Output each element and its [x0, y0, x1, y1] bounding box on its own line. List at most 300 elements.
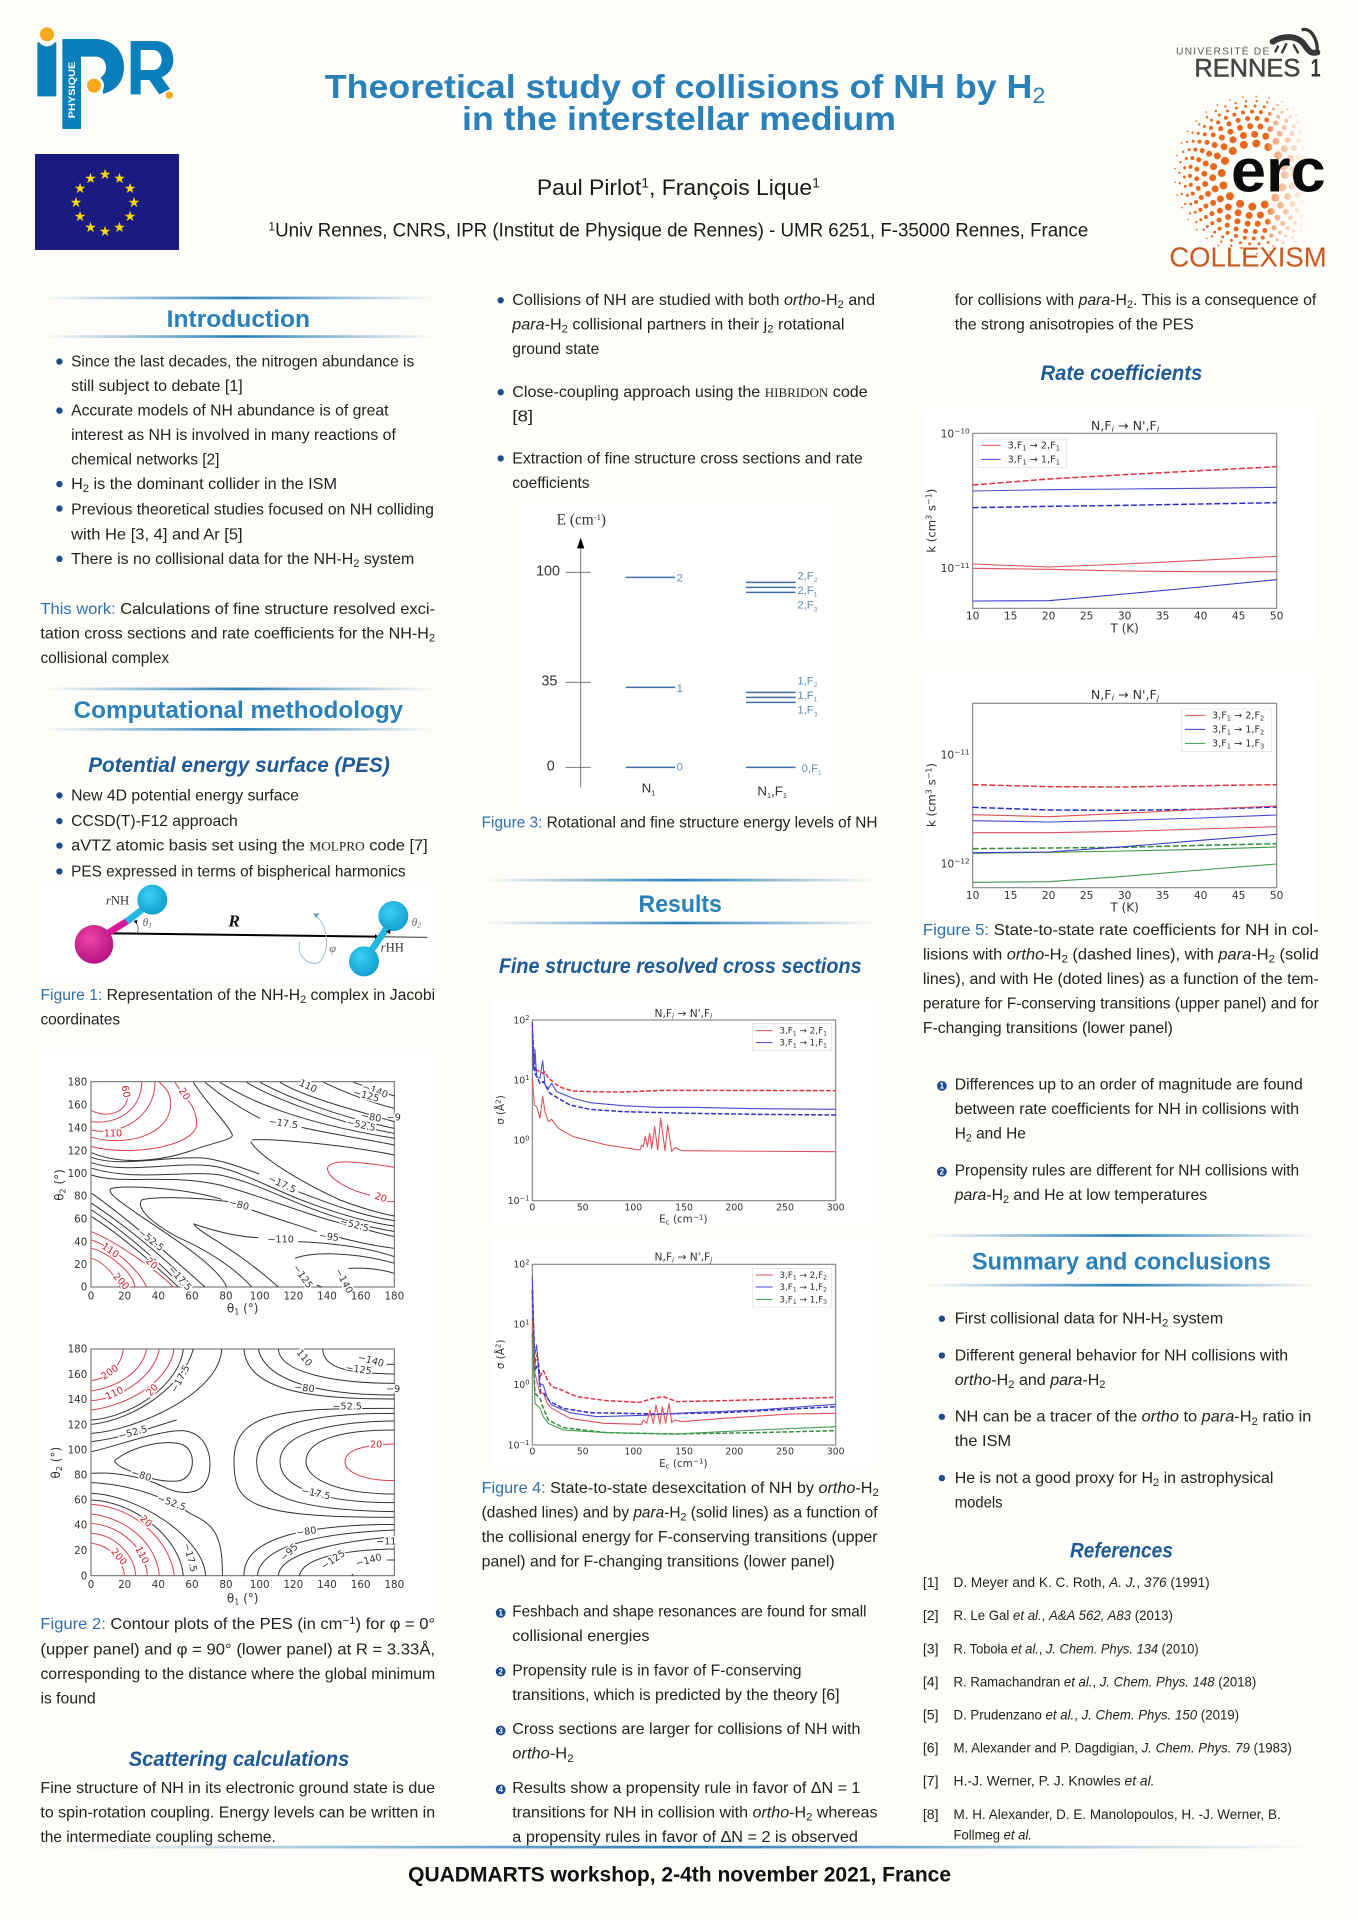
numbered findings: rate coefficients: and He at low temperatures — [1009, 1187, 1207, 1204]
logo: EU flag: ★ — [74, 180, 86, 196]
chart: cross sections F-changing: 3,F — [779, 1271, 793, 1281]
figure 3: energy level diagram: 1 — [814, 697, 818, 704]
bullet list: introduction: 2 — [83, 483, 89, 495]
chart: cross sections F-changing: 0 — [525, 1379, 529, 1387]
figure 3: energy level diagram — [520, 507, 833, 807]
subheading: scattering calculations: Scattering calculations — [129, 1748, 349, 1771]
bullet list: introduction: 2 — [353, 558, 359, 570]
chart: cross sections F-changing: → 1,F — [797, 1283, 823, 1293]
contour plot: lower panel phi=90: −125 — [345, 1363, 372, 1377]
numbered findings: cross sections: whereas — [812, 1805, 878, 1822]
subheading: references: References — [1070, 1540, 1173, 1563]
figure 1: Jacobi coordinates of NH-H2: θ — [143, 917, 148, 929]
chart: rate coefficients F-changing: ) — [924, 763, 938, 768]
chart: rate coefficients F-conserving: i — [1157, 424, 1160, 434]
numbered findings: cross sections: 2 — [498, 1668, 503, 1677]
contour plot: lower panel phi=90: 2 — [55, 1466, 64, 1471]
chart: cross sections F-changing: ) — [495, 1340, 507, 1344]
title: Theoretical study of collisions of NH by H — [325, 68, 991, 106]
heading: Results: Results — [639, 891, 722, 918]
chart: cross sections F-changing: j — [709, 1255, 713, 1264]
affiliation: Univ Rennes, CNRS, IPR (Institut de Physique de Rennes) - UMR 6251, F-35000 Rennes, France — [275, 221, 1088, 242]
reference list: M. H. Alexander, D. E. Manolopoulos, H. -J. Werner, B. — [954, 1806, 1281, 1822]
contour plot: upper panel phi=0: 60 — [119, 1085, 132, 1099]
panel: references — [923, 1540, 1292, 1843]
chart: cross sections F-changing: i — [672, 1255, 674, 1264]
logo: Université de Rennes 1: RENNES — [1194, 55, 1300, 83]
chart: cross sections F-changing: 100 — [624, 1447, 642, 1458]
logo: EU flag: ★ — [99, 166, 111, 182]
bullet list: PES: PES expressed in terms of bispherical harmonics — [71, 863, 406, 880]
chart: rate coefficients F-changing: N,F — [1091, 687, 1112, 702]
chart: rate coefficients F-conserving: ) — [924, 489, 938, 493]
contour plot: upper panel phi=0: 60 — [185, 1290, 199, 1302]
title: in the interstellar medium — [462, 100, 896, 138]
chart: rate coefficients F-conserving: N,F — [1091, 418, 1112, 433]
chart: rate coefficients F-changing: 3,F — [1212, 725, 1227, 736]
bullet list: introduction: with He [3, 4] and Ar [5] — [70, 526, 243, 543]
caption: figure 2: ) for φ = 0° — [356, 1616, 435, 1633]
figure 1: Jacobi coordinates of NH-H2: φ — [329, 941, 336, 955]
chart: cross sections F-changing: 3 — [823, 1299, 827, 1306]
logo: ERC COLLEXISM: COLLEXISM — [1169, 242, 1327, 273]
chart: rate coefficients F-changing: s — [924, 779, 938, 789]
contour plot: lower panel phi=90: −95 — [278, 1542, 301, 1564]
text block: scattering — [40, 1780, 435, 1846]
bullet list: conclusions: NH can be a tracer of the ortho to para-H — [955, 1409, 1251, 1426]
contour plot: lower panel phi=90: −17.5 — [169, 1363, 193, 1395]
figure 3: energy level diagram: 3 — [814, 606, 818, 613]
contour plot: lower panel phi=90: −52.5 — [332, 1401, 362, 1412]
contour plot: upper panel phi=0: 100 — [250, 1290, 270, 1302]
contour plot: lower panel phi=90: 100 — [68, 1444, 87, 1456]
chart: rate coefficients F-changing: j — [1156, 693, 1160, 703]
figure 3: energy level diagram: 3 — [814, 711, 818, 718]
contour plot: upper panel phi=0: 20 — [176, 1086, 192, 1102]
contour plot: lower panel phi=90: 20 — [370, 1439, 382, 1450]
bullet list: conclusions: 2 — [1099, 1379, 1105, 1391]
contour plot: lower panel phi=90: 20 — [74, 1545, 87, 1557]
chart: rate coefficients F-changing: 35 — [1156, 889, 1169, 902]
contour plot: lower panel phi=90: 60 — [74, 1494, 87, 1506]
chart: rate coefficients F-changing: 1 — [1227, 714, 1231, 722]
chart: rate coefficients F-conserving: 3 — [924, 515, 933, 520]
bullet list: conclusions: system — [1168, 1311, 1223, 1328]
chart: cross sections F-changing: 250 — [776, 1447, 794, 1458]
contour plot: upper panel phi=0: 40 — [152, 1290, 165, 1302]
chart: cross sections F-conserving: ) — [495, 1095, 507, 1099]
numbered findings: cross sections: 1 — [498, 1609, 503, 1618]
bullet list: conclusions: 2 — [1008, 1379, 1014, 1391]
chart: rate coefficients F-changing: 3,F — [1212, 711, 1227, 722]
chart: cross sections F-conserving: 1 — [525, 1074, 529, 1082]
chart: cross sections F-conserving: 1 — [793, 1042, 797, 1049]
contour plot: upper panel phi=0: 1 — [234, 1307, 239, 1316]
panel: computational methodology — [43, 688, 435, 880]
chart: rate coefficients F-changing: k (cm — [924, 794, 938, 827]
contour plot: lower panel phi=90: −80 — [296, 1525, 317, 1539]
chart: rate coefficients F-conserving: 35 — [1156, 610, 1169, 623]
figure 1: Jacobi coordinates of NH-H2: rHH — [381, 940, 404, 954]
contour plot: upper panel phi=0: 20 — [143, 1256, 159, 1272]
chart: cross sections F-conserving: σ (Å — [495, 1104, 507, 1125]
panel: middle column bullets: [8] — [512, 409, 533, 426]
bullet list: conclusions: Different general behavior for NH collisions with — [955, 1347, 1288, 1364]
numbered findings: cross sections: transitions, which is predicted by the theory [6] — [512, 1687, 840, 1704]
figure 3: energy level diagram: 1 — [677, 683, 683, 695]
reference list: [2] — [923, 1607, 939, 1623]
chart: cross sections F-changing: −1 — [693, 1457, 704, 1466]
text block: right column continuation — [955, 292, 1317, 385]
contour plot: lower panel phi=90: −9 — [386, 1384, 400, 1395]
chart: rate coefficients F-conserving: 45 — [1232, 610, 1245, 623]
bullet list: introduction — [56, 353, 434, 570]
contour plot: lower panel phi=90: 160 — [68, 1369, 87, 1381]
chart: rate coefficients F-changing: → N',F — [1114, 687, 1157, 702]
reference list: [6] — [923, 1740, 939, 1756]
logo: EU flag: ★ — [124, 208, 136, 224]
contour plot: lower panel phi=90 — [49, 1344, 404, 1607]
contour plot: lower panel phi=90: 20 — [145, 1382, 161, 1399]
chart: rate coefficients F-conserving: 10 — [941, 562, 954, 575]
caption: figure 5: F-changing transitions (lower panel) — [923, 1020, 1173, 1037]
figure 3: energy level diagram: 1,F — [797, 675, 814, 687]
chart: rate coefficients F-changing: → 2,F — [1231, 711, 1260, 722]
chart: rate coefficients F-conserving: −10 — [954, 426, 970, 435]
figure 3: energy level diagram: 1,F — [797, 705, 814, 717]
text block: this work: 2 — [429, 633, 435, 645]
contour plot: upper panel phi=0: 160 — [351, 1290, 371, 1302]
numbered findings: rate coefficients: Propensity rules are different for NH collisions with — [955, 1162, 1299, 1179]
title: 2 — [1032, 83, 1045, 108]
chart: rate coefficients F-conserving: → 2,F — [1027, 441, 1056, 452]
chart: rate coefficients F-conserving: 1 — [1056, 458, 1060, 466]
chart: rate coefficients F-changing: 3 — [924, 789, 933, 794]
figure 3: energy level diagram: 35 — [541, 674, 557, 690]
contour plot: lower panel phi=90: (°) — [239, 1592, 258, 1606]
contour plot: upper panel phi=0: 80 — [74, 1191, 87, 1203]
chart: rate coefficients F-changing: 2 — [1260, 728, 1264, 736]
authors: Paul Pirlot — [537, 175, 637, 200]
contour plot: upper panel phi=0: −17.5 — [266, 1173, 298, 1196]
chart: cross sections F-changing: 2 — [494, 1344, 503, 1348]
contour plot: lower panel phi=90: 0 — [88, 1579, 94, 1591]
caption: figure 5: lines), and with He (doted lines) as a function of the tem- — [923, 971, 1319, 988]
contour plot: upper panel phi=0: −80 — [360, 1110, 382, 1125]
reference list: R. Ramachandran et al., J. Chem. Phys. 148 (2018) — [954, 1673, 1256, 1689]
contour plot: upper panel phi=0: 160 — [68, 1100, 87, 1112]
numbered findings: cross sections: Feshbach and shape resonances are found for small — [512, 1604, 866, 1621]
figure 3: energy level diagram: ) — [601, 512, 606, 529]
text block: this work — [40, 601, 435, 667]
contour plot: upper panel phi=0: 20 — [373, 1191, 388, 1205]
reference list: D. Prudenzano et al., J. Chem. Phys. 150 (2019) — [954, 1707, 1239, 1723]
contour plot: upper panel phi=0: 60 — [74, 1214, 87, 1226]
caption: figure 1: 2 — [300, 994, 306, 1006]
chart: cross sections F-conserving: 10 — [513, 1075, 525, 1086]
bullet list: introduction: interest as NH is involved in many reactions of — [71, 427, 396, 444]
chart: rate coefficients F-conserving — [923, 408, 1317, 638]
figure 3: energy level diagram: 2 — [814, 577, 818, 584]
contour plot: lower panel phi=90: −52.5 — [117, 1424, 149, 1442]
chart: cross sections F-conserving: i — [710, 1012, 712, 1021]
caption: figure 1: Figure 1: Representation of the NH-H — [40, 987, 303, 1004]
chart: cross sections F-changing: 300 — [827, 1447, 845, 1458]
panel: middle column bullets: Extraction of fine structure cross sections and rate — [512, 450, 863, 467]
chart: cross sections F-changing: 10 — [513, 1380, 525, 1391]
chart: cross sections F-conserving: 0 — [529, 1202, 535, 1213]
chart: cross sections F-conserving: 1 — [793, 1030, 797, 1037]
text block: this work: This work: Calculations of fine structure resolved exci- — [40, 601, 435, 618]
contour plot: lower panel phi=90: −80 — [130, 1467, 153, 1484]
chart: cross sections F-changing: 10 — [513, 1260, 525, 1271]
chart: rate coefficients F-changing: 3,F — [1212, 739, 1227, 750]
caption: figure 3: Figure 3: Rotational and fine structure energy levels of NH — [482, 814, 878, 831]
authors: , François Lique — [649, 175, 812, 200]
logo: ERC COLLEXISM — [1169, 96, 1332, 273]
chart: rate coefficients F-conserving: 3,F — [1008, 455, 1022, 466]
panel: middle column bullets: coefficients — [512, 475, 590, 492]
logo: ERC COLLEXISM: erc — [1231, 136, 1326, 205]
panel: middle column bullets: para-H — [512, 317, 561, 334]
logo: EU flag: ★ — [84, 170, 97, 186]
chart: rate coefficients F-conserving: 30 — [1118, 610, 1132, 623]
figure 3: energy level diagram: 100 — [536, 564, 560, 580]
bullet list: conclusions: He is not a good proxy for H — [955, 1470, 1153, 1487]
caption: figure 5 — [923, 922, 1319, 1037]
figure 3: energy level diagram: 2,F — [797, 585, 814, 597]
chart: cross sections F-changing: 200 — [725, 1447, 743, 1458]
figure 1: Jacobi coordinates of NH-H2: rNH — [106, 894, 129, 908]
panel: middle column bullets: 2 — [838, 299, 844, 311]
logo: EU flag: ★ — [74, 208, 86, 224]
contour plot: lower panel phi=90: 0 — [81, 1570, 87, 1582]
caption: figure 1: coordinates — [40, 1012, 120, 1029]
chart: rate coefficients F-conserving: 15 — [1004, 610, 1017, 623]
contour plot: upper panel phi=0: 2 — [58, 1188, 67, 1193]
figure 1: Jacobi coordinates of NH-H2: 1 — [148, 921, 152, 930]
contour plot: lower panel phi=90: −140 — [355, 1552, 383, 1570]
chart: cross sections F-changing: 1 — [793, 1275, 797, 1282]
logo: Université de Rennes 1: 1 — [1311, 55, 1321, 83]
bullet list: conclusions: para-H — [1050, 1372, 1099, 1389]
chart: cross sections F-changing: 10 — [513, 1320, 525, 1331]
heading: Computational methodology: Computational methodology — [74, 697, 404, 724]
chart: rate coefficients F-changing: −11 — [954, 748, 970, 757]
contour plot: lower panel phi=90: θ — [49, 1471, 63, 1478]
numbered findings: rate coefficients: 2 — [966, 1133, 972, 1145]
reference list: Follmeg et al. — [954, 1827, 1032, 1843]
chart: cross sections F-changing: N,F — [654, 1251, 672, 1264]
reference list: R. Toboła et al., J. Chem. Phys. 134 (2010) — [954, 1640, 1199, 1656]
bullet list: introduction: There is no collisional data for the NH-H — [71, 551, 353, 568]
subheading: cross sections: Fine structure resolved cross sections — [499, 955, 862, 978]
contour plot: lower panel phi=90: 1 — [234, 1598, 239, 1607]
caption: figure 1 — [40, 987, 435, 1029]
panel: scattering calculations — [40, 1748, 435, 1846]
numbered findings: cross sections: transitions for NH in collision with ortho-H — [512, 1805, 806, 1822]
chart: rate coefficients F-conserving: 1 — [1056, 444, 1060, 452]
bullet list: conclusions: 2 — [1162, 1318, 1168, 1330]
chart: rate coefficients F-changing: −12 — [954, 856, 970, 865]
bullet list: conclusions: ratio in — [1258, 1409, 1311, 1426]
reference list: H.-J. Werner, P. J. Knowles et al. — [954, 1773, 1155, 1789]
numbered findings: cross sections: Cross sections are larger for collisions of NH with — [512, 1721, 860, 1738]
chart: rate coefficients F-conserving: 1 — [1022, 458, 1027, 466]
contour plot: lower panel phi=90: 200 — [99, 1363, 121, 1382]
figure 1: Jacobi coordinates of NH-H2: θ — [412, 917, 417, 929]
figure 1: Jacobi coordinates of NH-H2: 2 — [417, 921, 421, 930]
chart: cross sections F-conserving: 150 — [675, 1202, 693, 1213]
caption: figure 2 — [40, 1615, 435, 1708]
chart: cross sections F-conserving: ) — [704, 1214, 708, 1226]
chart: rate coefficients F-changing: 10 — [941, 749, 954, 762]
bullet list: PES — [56, 787, 428, 880]
bullet list: introduction: H — [71, 476, 83, 493]
chart: rate coefficients F-changing: 30 — [1118, 889, 1132, 902]
caption: figure 2: is found — [40, 1691, 96, 1708]
contour plot: upper panel phi=0: (°) — [239, 1301, 258, 1315]
chart: rate coefficients F-conserving: i — [1112, 424, 1115, 434]
logo: IPR — [37, 27, 173, 129]
bullet list: PES: aVTZ atomic basis set using the MOLPRO code [7] — [71, 838, 428, 855]
chart: cross sections F-changing: c — [666, 1462, 670, 1471]
reference list: M. Alexander and P. Dagdigian, J. Chem. Phys. 79 (1983) — [954, 1740, 1292, 1756]
figure 1: Jacobi coordinates of NH-H2: R — [227, 912, 240, 931]
numbered findings: rate coefficients: para-H — [955, 1187, 1003, 1204]
bullet list: conclusions: and — [1014, 1372, 1050, 1389]
numbered findings: cross sections: Propensity rule is in favor of F-conserving — [512, 1662, 802, 1679]
chart: cross sections F-changing: 1 — [525, 1318, 529, 1326]
logo: Université de Rennes 1: UNIVERSITÉ DE — [1176, 44, 1269, 57]
contour plot: upper panel phi=0: 0 — [88, 1290, 94, 1302]
heading: Summary and conclusions: Summary and conclusions — [972, 1249, 1271, 1276]
figure 3: energy level diagram: ,F — [771, 783, 783, 798]
contour plot: lower panel phi=90: 80 — [74, 1469, 87, 1481]
contour plot: lower panel phi=90: 120 — [68, 1419, 87, 1431]
title block — [268, 68, 1088, 242]
figure 3: energy level diagram: 1,F — [797, 690, 814, 702]
bullet list: introduction: Previous theoretical studies focused on NH colliding — [71, 502, 434, 519]
text block: scattering: the intermediate coupling scheme. — [40, 1829, 276, 1846]
reference list: [8] — [923, 1806, 939, 1822]
text block: this work: tation cross sections and rate coefficients for the NH-H — [40, 626, 425, 643]
chart: rate coefficients F-conserving: −1 — [924, 493, 933, 505]
contour plot: upper panel phi=0: −125 — [290, 1263, 314, 1291]
contour plot: upper panel phi=0: 100 — [68, 1168, 87, 1180]
panel: middle column bullets: Close-coupling approach using the HIBRIDON code — [512, 384, 868, 401]
contour plot: lower panel phi=90: 180 — [68, 1344, 87, 1356]
numbered findings: cross sections: Results show a propensity rule in favor of ΔN = 1 — [512, 1780, 861, 1797]
logo: EU flag: ★ — [113, 170, 126, 186]
numbered findings: rate coefficients: 2 — [940, 1167, 945, 1176]
chart: rate coefficients F-conserving: 3,F — [1008, 441, 1022, 452]
chart: rate coefficients F-changing: 15 — [1004, 889, 1017, 902]
contour plot: upper panel phi=0: 0 — [81, 1282, 87, 1294]
contour plot: lower panel phi=90: 160 — [351, 1579, 371, 1591]
text block: scattering: Fine structure of NH in its electronic ground state is due — [40, 1780, 435, 1797]
chart: rate coefficients F-changing: 20 — [1042, 889, 1056, 902]
contour plot: lower panel phi=90: 110 — [104, 1385, 125, 1403]
contour plot: lower panel phi=90: 120 — [283, 1579, 303, 1591]
caption: figure 4: panel) and for F-changing transitions (lower panel) — [482, 1553, 835, 1570]
numbered findings: rate coefficients: 1 — [940, 1082, 945, 1091]
contour plot: lower panel phi=90: 40 — [74, 1520, 87, 1532]
chart: rate coefficients F-conserving: 20 — [1042, 610, 1056, 623]
caption: figure 4: (dashed lines) and by para-H — [482, 1504, 681, 1521]
contour plot: lower panel phi=90: 200 — [108, 1547, 129, 1568]
contour plot: upper panel phi=0: 180 — [68, 1076, 87, 1088]
contour plot: lower panel phi=90: 40 — [152, 1579, 165, 1591]
chart: cross sections F-changing: −1 — [520, 1439, 529, 1447]
numbered findings: cross sections: 3 — [498, 1726, 503, 1735]
chart: rate coefficients F-conserving: k (cm — [924, 520, 938, 553]
logo: EU flag: ★ — [99, 223, 111, 239]
bullet list: introduction: system — [359, 551, 414, 568]
chart: cross sections F-changing: 1 — [793, 1299, 797, 1306]
contour plot: upper panel phi=0: −125 — [352, 1087, 380, 1105]
caption: figure 5: perature for F-conserving transitions (upper panel) and for — [923, 996, 1319, 1013]
chart: cross sections F-conserving: (cm — [670, 1214, 693, 1226]
contour plot: upper panel phi=0 — [52, 1076, 404, 1316]
authors: 1 — [641, 176, 649, 191]
contour plot: upper panel phi=0: 80 — [219, 1290, 233, 1302]
contour plot: lower panel phi=90: 80 — [219, 1579, 233, 1591]
caption: figure 1: complex in Jacobi — [306, 987, 435, 1004]
text block: right column continuation: for collisions with para-H — [955, 292, 1127, 309]
reference list: [5] — [923, 1707, 939, 1723]
contour plot: upper panel phi=0: 20 — [74, 1259, 87, 1271]
chart: cross sections F-changing: E — [659, 1458, 666, 1470]
bullet list: introduction: is the dominant collider in the ISM — [89, 476, 337, 493]
chart: cross sections F-conserving: −1 — [520, 1195, 529, 1203]
caption: figure 2: Figure 2: Contour plots of the PES (in cm — [40, 1616, 333, 1633]
chart: rate coefficients F-changing: 40 — [1194, 889, 1208, 902]
contour plot: upper panel phi=0: 180 — [384, 1290, 404, 1302]
contour plot: upper panel phi=0: θ — [227, 1301, 234, 1315]
chart: rate coefficients F-changing: 1 — [1227, 742, 1231, 750]
reference list — [923, 1574, 1292, 1843]
contour plot: upper panel phi=0: 140 — [68, 1123, 87, 1135]
chart: cross sections F-changing: 50 — [577, 1447, 589, 1458]
caption: figure 4: (solid lines) as a function of — [686, 1504, 878, 1521]
chart: rate coefficients F-conserving: 25 — [1080, 610, 1093, 623]
logo: Université de Rennes 1 — [1176, 29, 1321, 83]
chart: cross sections F-changing: (cm — [670, 1458, 693, 1470]
caption: figure 5: lisions with ortho-H — [923, 947, 1061, 964]
contour plot: upper panel phi=0: −9 — [387, 1113, 401, 1124]
figure 3: energy level diagram: N — [757, 783, 767, 798]
chart: cross sections F-changing — [492, 1238, 875, 1471]
bullet list: conclusions: the ISM — [955, 1433, 1011, 1450]
contour plot: upper panel phi=0: −80 — [228, 1197, 250, 1213]
reference list: [1] — [923, 1574, 939, 1590]
numbered findings: cross sections: 4 — [498, 1785, 503, 1794]
chart: cross sections F-conserving: 1 — [823, 1042, 827, 1049]
contour plot: upper panel phi=0: −52.5 — [135, 1227, 166, 1254]
contour plot: upper panel phi=0: −52.5 — [345, 1117, 377, 1134]
caption: figure 4: 2 — [680, 1511, 686, 1523]
figure 3: energy level diagram: 1 — [783, 791, 787, 800]
chart: cross sections F-changing: 2 — [823, 1275, 827, 1282]
caption: figure 4 — [482, 1480, 879, 1570]
bullet list: conclusions: 2 — [1153, 1477, 1159, 1489]
chart: rate coefficients F-changing: 1 — [1227, 728, 1231, 736]
contour plot: lower panel phi=90: −80 — [294, 1382, 315, 1395]
figure 3: energy level diagram: 2,F — [797, 600, 814, 612]
figure 3: energy level diagram: 2 — [814, 682, 818, 689]
contour plot: upper panel phi=0: 120 — [283, 1290, 303, 1302]
